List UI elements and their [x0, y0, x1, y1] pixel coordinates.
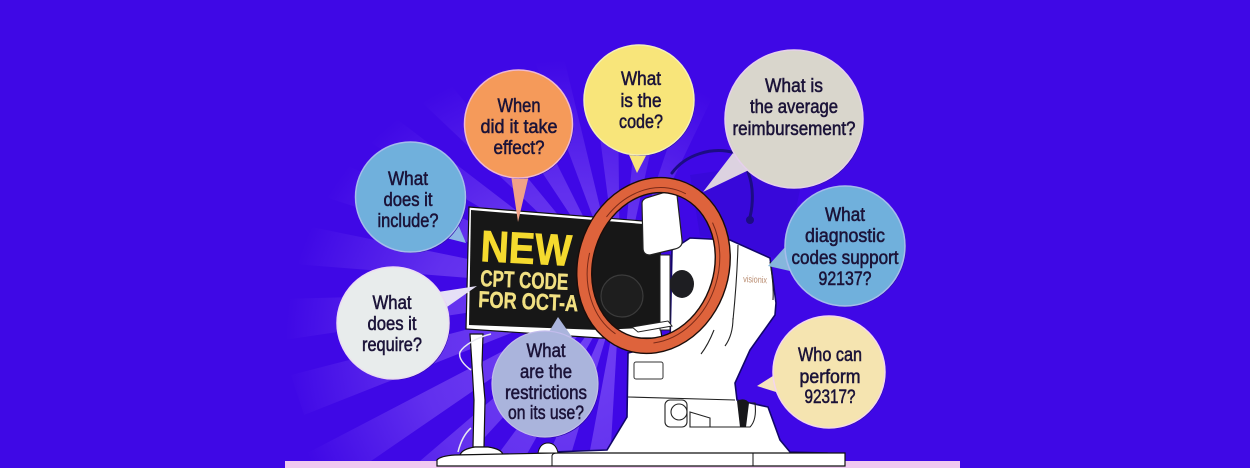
machine body	[552, 238, 845, 463]
plate	[634, 362, 663, 379]
bubble: who can perform: 92317?	[804, 386, 856, 408]
bubble: what does it require: require?	[362, 334, 422, 356]
base lump	[538, 443, 558, 453]
monitor headline: CPT CODE	[480, 265, 569, 295]
bubble: average reimbursement: What is	[765, 75, 823, 97]
bubble: restrictions on use: restrictions	[505, 382, 587, 404]
cable	[672, 151, 752, 222]
bubble: diagnostic codes: diagnostic	[805, 225, 885, 247]
monitor	[466, 207, 662, 338]
bubble: diagnostic codes: codes support	[792, 247, 899, 269]
bubble: what does it require: does it	[368, 313, 417, 335]
bubble: restrictions on use: are the	[520, 361, 572, 383]
bubble: when did it take effect: effect?	[494, 137, 545, 159]
bubble: average reimbursement: reimbursement?	[732, 118, 856, 140]
bubble: diagnostic codes	[768, 186, 906, 307]
bubble: who can perform: perform	[800, 366, 860, 388]
bubble: diagnostic codes: What	[825, 204, 866, 226]
bubble: what does it include: include?	[378, 210, 439, 232]
monitor headline: NEW	[479, 222, 573, 276]
bubble: who can perform: Who can	[798, 344, 862, 366]
monitor headline	[478, 222, 579, 316]
chin rest	[642, 190, 682, 255]
OCT machine	[437, 190, 845, 466]
bubble: when did it take effect	[464, 70, 574, 222]
bubble: what does it include: What	[388, 168, 429, 190]
bubble: what does it include: does it	[384, 189, 433, 211]
black wedge	[737, 399, 749, 427]
joystick	[670, 270, 694, 298]
monitor headline: FOR OCT-A	[478, 286, 579, 316]
column	[660, 255, 670, 330]
bubble: when did it take effect: When	[498, 95, 540, 117]
bubble: average reimbursement: the average	[750, 96, 838, 118]
floor strip	[285, 461, 960, 468]
bubble: what is the code: code?	[619, 111, 663, 133]
bubble: what is the code: is the	[620, 90, 662, 112]
bubble: diagnostic codes: 92137?	[818, 268, 872, 290]
bubble: what does it include	[356, 142, 466, 253]
bubble: average reimbursement	[703, 50, 864, 192]
bubble: restrictions on use	[492, 317, 599, 438]
bubble: what is the code: What	[621, 68, 662, 90]
bubble: what is the code	[584, 45, 695, 173]
machine base bar	[437, 453, 845, 466]
fold lines	[701, 245, 773, 354]
forehead bar	[632, 321, 672, 332]
knob	[628, 397, 755, 427]
bubble: when did it take effect: did it take	[480, 116, 558, 138]
bubble: who can perform	[757, 316, 886, 429]
bubble: restrictions on use: What	[526, 340, 566, 362]
bubble: what does it require	[337, 267, 477, 380]
bubble: restrictions on use: on its use?	[508, 402, 584, 424]
monitor stand	[458, 334, 503, 455]
bubble: what does it require: What	[372, 292, 412, 314]
orange ring	[555, 158, 752, 373]
base panel line	[552, 453, 753, 466]
question bubbles	[337, 45, 906, 438]
brand label: visionix	[743, 274, 768, 286]
